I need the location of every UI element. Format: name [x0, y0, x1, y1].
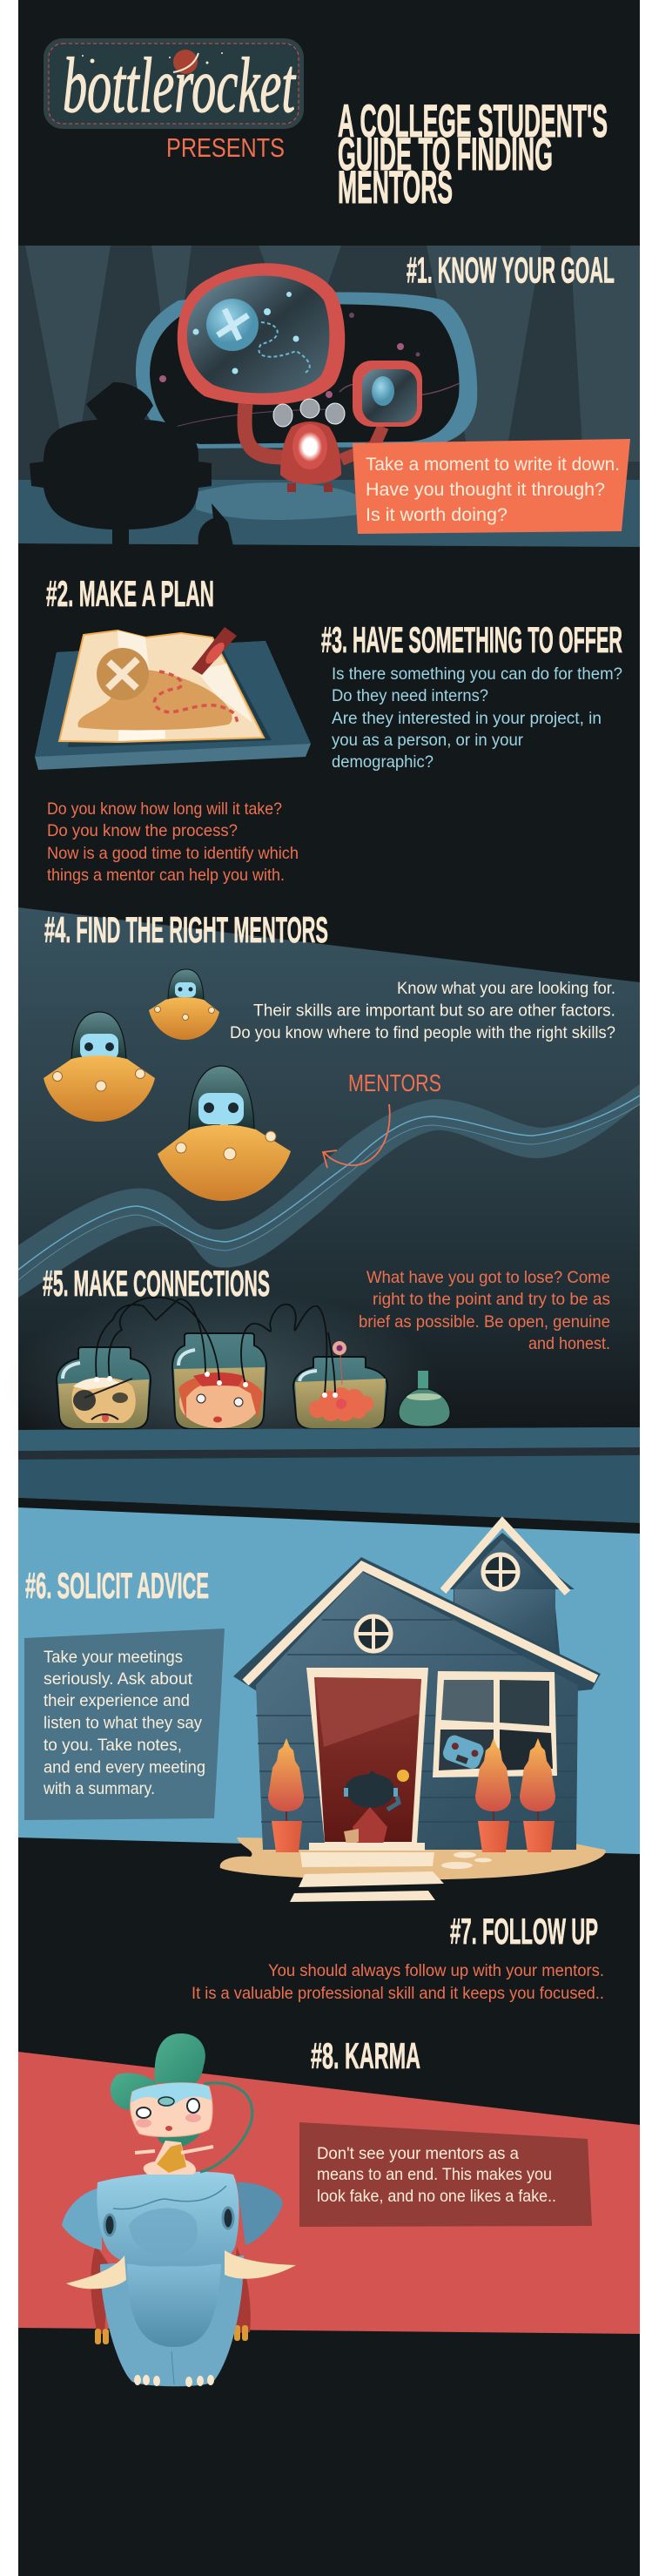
large screen — [178, 263, 345, 405]
leaves — [155, 2033, 205, 2083]
potted plant left — [268, 1738, 304, 1852]
panel: karma — [18, 2052, 640, 2334]
main roof — [245, 1566, 596, 1682]
icon: small ufo — [149, 969, 219, 1040]
text: have something to offer: Is there something you can do for them? — [332, 664, 622, 684]
label: mentors: MENTORS — [348, 1069, 441, 1096]
text: have something to offer: Do they need interns? — [332, 686, 488, 705]
connecting wires — [96, 1298, 335, 1395]
space view — [150, 304, 460, 444]
text: make a plan: things a mentor can help you with. — [47, 866, 285, 885]
small screen — [353, 361, 422, 427]
title — [338, 96, 608, 213]
callout: solicit advice: listen to what they say — [44, 1714, 202, 1733]
tassels — [95, 2325, 248, 2344]
text: make connections: What have you got to lose? Come — [366, 1268, 610, 1287]
panel: shelf — [18, 1427, 640, 1534]
callout: solicit advice: seriously. Ask about — [44, 1669, 193, 1689]
head — [97, 2172, 239, 2267]
wave band — [18, 1084, 640, 1298]
callout: know your goal: Have you thought it through? — [366, 480, 605, 500]
jar glow — [4, 1289, 440, 1480]
panel: know your goal — [18, 246, 640, 547]
walls — [256, 1572, 578, 1850]
face — [131, 2083, 212, 2137]
text: make a plan: Do you know the process? — [47, 821, 238, 840]
jar: skull — [57, 1347, 151, 1429]
callout: solicit advice: Take your meetings — [44, 1648, 183, 1667]
panel: solicit advice — [18, 1507, 640, 1854]
text: have something to offer: you as a person, or in your — [332, 731, 523, 750]
heading: make a plan: #2. MAKE A PLAN — [46, 573, 214, 614]
text: have something to offer: Are they interested in your project, in — [332, 709, 602, 728]
silhouette character — [30, 382, 212, 545]
robot head in window — [440, 1733, 486, 1770]
door — [306, 1668, 428, 1843]
text: find the right mentors: Know what you are looking for. — [397, 979, 615, 998]
heading: make connections: #5. MAKE CONNECTIONS — [43, 1263, 270, 1304]
callout: solicit advice: to you. Take notes, — [44, 1736, 182, 1755]
arrow: to mentors — [323, 1104, 390, 1168]
illustration: elephant — [62, 2172, 296, 2387]
text: make connections: and honest. — [528, 1334, 610, 1353]
callout: karma: look fake, and no one likes a fake.. — [317, 2187, 556, 2206]
callout: solicit advice: their experience and — [44, 1691, 190, 1710]
text: make a plan: Do you know how long will it take? — [47, 799, 282, 819]
text: make connections: brief as possible. Be open, genuine — [359, 1312, 610, 1332]
text: follow up — [192, 1961, 604, 2003]
robot arms — [245, 404, 283, 457]
heading: solicit advice: #6. SOLICIT ADVICE — [25, 1565, 209, 1606]
logo: bottlerocket badge — [44, 38, 304, 129]
knocking character — [344, 1770, 399, 1844]
eyeball — [333, 1341, 346, 1385]
callout: karma: Don't see your mentors as a — [317, 2144, 519, 2163]
body — [144, 2141, 196, 2175]
heading: karma: #8. KARMA — [311, 2035, 420, 2076]
text: make a plan — [47, 799, 299, 885]
callout: solicit advice: with a summary. — [43, 1779, 155, 1798]
logo: bottlerocket badge: bottlerocket — [63, 43, 296, 129]
shingles behind roof — [233, 1557, 601, 1694]
panel: find the right mentors — [4, 907, 640, 1480]
potted plant middle — [475, 1738, 511, 1852]
text: follow up: You should always follow up with your mentors. — [268, 1961, 604, 1980]
text: follow up: It is a valuable professional skill and it keeps you focused.. — [192, 1984, 604, 2003]
text: find the right mentors: Do you know where to find people with the right skills? — [230, 1023, 615, 1042]
presents label: PRESENTS — [166, 132, 285, 163]
callout: know your goal: Take a moment to write it down. — [366, 455, 620, 475]
floor highlight — [196, 482, 366, 520]
text: make connections — [359, 1268, 610, 1353]
icon: large ufo — [158, 1066, 291, 1201]
tower — [440, 1533, 575, 1672]
callout: know your goal: Is it worth doing? — [366, 505, 507, 525]
floor — [18, 480, 640, 547]
title: MENTORS — [338, 162, 453, 213]
drape — [91, 2245, 251, 2334]
heading: find the right mentors: #4. FIND THE RIGHT MENTORS — [44, 909, 328, 950]
text: make a plan: Now is a good time to identify which — [47, 844, 299, 863]
text: find the right mentors: Their skills are important but so are other factors. — [253, 1001, 615, 1021]
jar connection dots — [94, 1372, 338, 1398]
icon: medium ufo — [44, 1012, 155, 1122]
callout: karma: means to an end. This makes you — [317, 2165, 552, 2184]
jar: girl head — [172, 1333, 266, 1429]
round window — [356, 1616, 391, 1651]
illustration: treasure map on table — [35, 627, 311, 770]
illustration: house — [220, 1522, 606, 1902]
planet on screen — [206, 299, 259, 351]
text: make connections: right to the point and try to be as — [373, 1290, 610, 1309]
vine — [200, 2083, 252, 2172]
text: find the right mentors — [230, 979, 615, 1042]
callout: solicit advice — [24, 1629, 225, 1820]
tusks — [66, 2256, 126, 2289]
callout: know your goal — [353, 439, 630, 534]
text: have something to offer — [332, 664, 622, 772]
illustration: meditating monk — [111, 2033, 252, 2175]
ground — [220, 1838, 606, 1880]
callout: karma — [299, 2122, 592, 2227]
window porthole — [136, 293, 477, 448]
callout: solicit advice: and end every meeting — [44, 1757, 205, 1777]
potted plant right — [520, 1738, 555, 1852]
flask — [399, 1371, 450, 1426]
steps — [309, 1843, 425, 1851]
illustration: jars on a shelf — [57, 1298, 450, 1429]
window — [433, 1671, 557, 1777]
toes — [134, 2375, 214, 2387]
body — [100, 2256, 244, 2386]
silhouette cat — [198, 503, 233, 546]
ears — [62, 2188, 102, 2250]
jar: brain — [293, 1357, 387, 1429]
text: have something to offer: demographic? — [332, 752, 434, 772]
robot — [280, 421, 341, 484]
